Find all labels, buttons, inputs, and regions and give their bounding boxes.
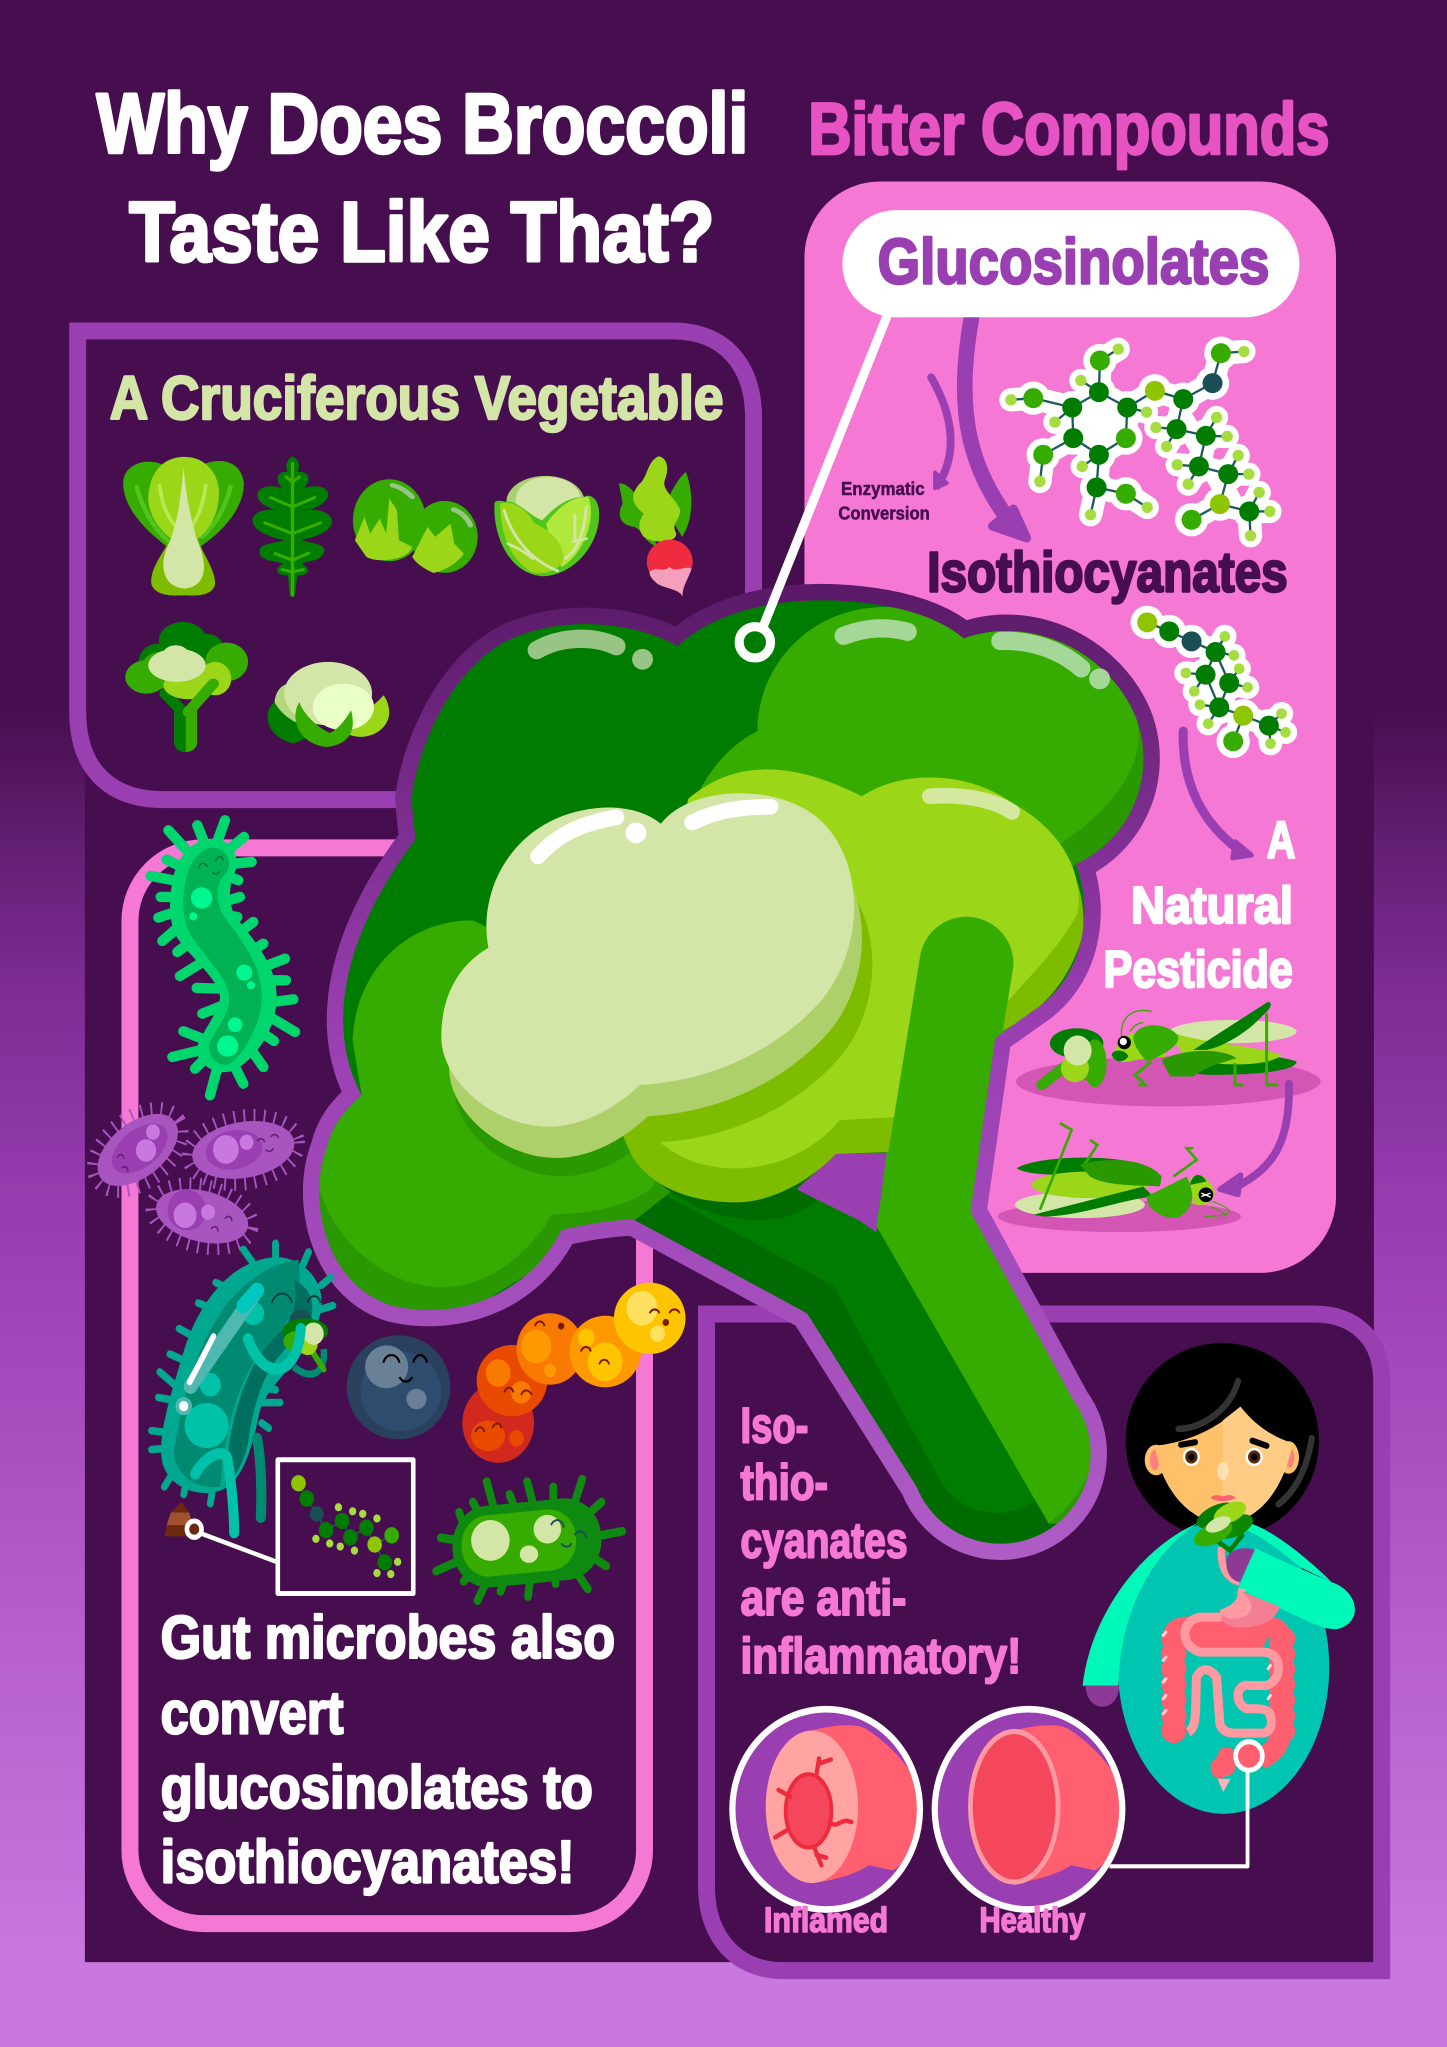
text: isothiocyanates are anti-inflammatory: thio- (740, 1454, 828, 1510)
icon: person eating broccoli with visible gut (1083, 1343, 1355, 1814)
text: isothiocyanates are anti-inflammatory: cyanates (740, 1512, 908, 1568)
panel: bitter compounds (804, 181, 1336, 1273)
label: enzymatic conversion: Enzymatic (841, 478, 925, 499)
text: isothiocyanates are anti-inflammatory: are anti- (740, 1570, 906, 1626)
heading: a natural pesticide: Natural (1131, 877, 1293, 935)
pointer dot (739, 627, 771, 658)
arrow: live to dead grasshopper (1220, 1084, 1289, 1195)
microbe: orange chain (462, 1283, 686, 1463)
molecule: glucosinolate (1005, 337, 1276, 541)
panel: anti-inflammatory (707, 1314, 1382, 1971)
vegetable icons (123, 456, 693, 752)
icon: radish (619, 456, 693, 596)
highlight dots (626, 649, 1110, 843)
callout: poop to molecules (187, 1460, 413, 1593)
text: gut microbes also convert (161, 1604, 615, 1896)
text: isothiocyanates are anti-inflammatory: inflammatory! (740, 1628, 1021, 1684)
icon: bok choy (123, 457, 244, 596)
heading: a natural pesticide: Pesticide (1104, 941, 1293, 999)
heading: a natural pesticide: A (1267, 812, 1296, 870)
icon: healthy intestine cross-section (935, 1709, 1126, 1910)
microbe: navy ball (347, 1335, 450, 1439)
label: enzymatic conversion: Conversion (838, 503, 930, 524)
heading: isothiocyanates: Isothiocyanates (927, 540, 1288, 603)
heading: bitter compounds: Bitter Compounds (808, 89, 1329, 170)
icon: poop (164, 1502, 195, 1536)
arrow: glucosinolates to isothiocyanates (965, 317, 1026, 538)
text: gut microbes also convert: glucosinolates to (161, 1754, 593, 1821)
callout: glucosinolates pill with pointer (739, 210, 1299, 658)
icon: arugula leaf (252, 456, 332, 595)
icon: small broccoli (125, 622, 248, 752)
microbe: purple cluster (80, 1092, 303, 1258)
icon: dead grasshopper (998, 1123, 1241, 1232)
icon: cauliflower (268, 662, 389, 747)
text: isothiocyanates are anti-inflammatory: Iso- (740, 1398, 808, 1454)
icon: live grasshopper eating broccoli (1016, 1002, 1321, 1107)
panel: cruciferous vegetables (78, 331, 754, 800)
pill (842, 210, 1299, 317)
heading: a natural pesticide (1104, 812, 1296, 999)
icon: brussels sprouts (353, 479, 478, 573)
heading: a cruciferous vegetable: A Cruciferous Vegetable (110, 364, 723, 433)
icon: cabbage (494, 476, 599, 576)
text: isothiocyanates are anti-inflammatory (740, 1398, 1021, 1684)
panel: gut microbes (130, 848, 644, 1924)
heading: glucosinolates: Glucosinolates (878, 225, 1269, 297)
connector: gut to cross-section (1109, 1769, 1248, 1866)
microbe: teal bacterium eating broccoli (152, 1243, 333, 1533)
title: Taste Like That? (129, 184, 714, 279)
icon: digestive tract (1163, 1589, 1283, 1792)
arrow: isothiocyanates to pesticide (1183, 731, 1251, 858)
text: gut microbes also convert: convert (161, 1680, 343, 1747)
title (97, 76, 748, 279)
microbe: green spiky worm (151, 820, 295, 1095)
text: gut microbes also convert: isothiocyanates! (161, 1829, 575, 1896)
illustration: giant broccoli (261, 600, 1175, 1544)
label: healthy: Healthy (979, 1901, 1086, 1940)
gut microbes (80, 1092, 686, 1601)
icon: inflamed intestine cross-section (732, 1709, 924, 1910)
pointer line (757, 313, 888, 641)
label: inflamed: Inflamed (764, 1901, 888, 1940)
molecule: isothiocyanate (1131, 606, 1291, 758)
molecule: inside box (291, 1475, 401, 1578)
text: gut microbes also convert: Gut microbes also (161, 1604, 615, 1671)
icon: broccoli held at mouth (1190, 1497, 1257, 1552)
microbe: green capsule (436, 1479, 622, 1601)
highlights on broccoli florets (537, 628, 1081, 856)
label: enzymatic conversion (838, 478, 930, 524)
arrow: enzymatic conversion (931, 377, 951, 488)
title: Why Does Broccoli (97, 76, 748, 171)
